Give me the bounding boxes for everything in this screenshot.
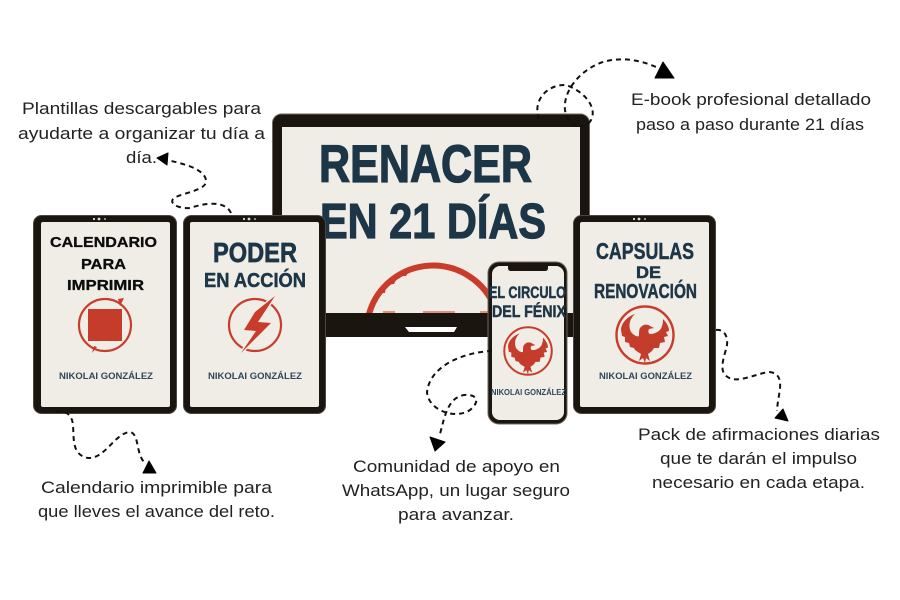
caption: calendario bbox=[38, 478, 275, 521]
title: DEL FÉNIX bbox=[492, 302, 566, 321]
title bbox=[50, 235, 157, 294]
arrow: to e-book caption bbox=[537, 59, 674, 126]
title: PODER bbox=[213, 237, 297, 268]
tablet screen bbox=[190, 222, 319, 407]
author: NIKOLAI GONZÁLEZ bbox=[491, 387, 566, 397]
title: PARA bbox=[81, 257, 127, 273]
icon: phoenix bbox=[504, 327, 552, 375]
caption: plantillas: Plantillas descargables para bbox=[22, 99, 262, 118]
caption: pack: que te darán el impulso bbox=[660, 449, 857, 468]
caption: e-book bbox=[631, 90, 871, 134]
caption: comunidad: WhatsApp, un lugar seguro bbox=[342, 481, 570, 500]
tablet frame bbox=[34, 216, 176, 414]
title: CALENDARIO bbox=[50, 235, 157, 251]
title bbox=[204, 237, 306, 292]
laptop emblem arc bbox=[369, 266, 495, 314]
icon: lightning bolt in circle bbox=[229, 296, 281, 353]
phone notch bbox=[508, 266, 548, 271]
caption: e-book: E-book profesional detallado bbox=[631, 90, 871, 109]
phone: el circulo del fenix bbox=[488, 262, 567, 424]
icon: phoenix bbox=[616, 306, 674, 364]
caption: calendario: Calendario imprimible para bbox=[41, 478, 273, 497]
caption: plantillas: ayudarte a organizar tu día a bbox=[18, 124, 266, 143]
author: NIKOLAI GONZÁLEZ bbox=[208, 371, 303, 381]
title: EN ACCIÓN bbox=[204, 268, 306, 292]
phone screen bbox=[492, 266, 564, 420]
tablet frame bbox=[574, 216, 716, 414]
laptop base bbox=[320, 313, 574, 337]
author: NIKOLAI GONZÁLEZ bbox=[59, 371, 154, 381]
title: DE bbox=[636, 263, 661, 282]
title: EL CIRCULO bbox=[489, 284, 566, 302]
laptop title: EN 21 DÍAS bbox=[320, 195, 546, 249]
tablet: calendario para imprimir bbox=[34, 216, 176, 414]
arrow: to pack caption bbox=[716, 330, 788, 421]
caption: comunidad: Comunidad de apoyo en bbox=[353, 457, 560, 476]
laptop title bbox=[319, 135, 546, 249]
camera dots bbox=[633, 218, 646, 220]
tablet: capsulas de renovacion bbox=[574, 216, 716, 414]
icon: red square in circle bbox=[79, 298, 131, 353]
caption: pack: Pack de afirmaciones diarias bbox=[638, 425, 880, 444]
camera dots bbox=[93, 218, 106, 220]
caption: pack bbox=[638, 425, 880, 492]
laptop notch bbox=[405, 327, 457, 332]
title: IMPRIMIR bbox=[67, 278, 145, 294]
arrow: to calendario caption bbox=[56, 412, 156, 473]
laptop title: RENACER bbox=[319, 135, 532, 194]
caption: e-book: paso a paso durante 21 días bbox=[636, 115, 864, 134]
caption: comunidad bbox=[342, 457, 570, 524]
author: NIKOLAI GONZÁLEZ bbox=[599, 371, 693, 381]
tablet frame bbox=[184, 216, 326, 414]
caption: calendario: que lleves el avance del reto. bbox=[38, 502, 275, 521]
laptop: renacer en 21 dias bbox=[272, 114, 590, 337]
laptop screen bbox=[282, 127, 580, 317]
tablet screen bbox=[580, 222, 709, 407]
title: RENOVACIÓN bbox=[594, 279, 697, 303]
caption: plantillas bbox=[18, 99, 266, 167]
camera dots bbox=[243, 218, 256, 220]
title: CAPSULAS bbox=[596, 238, 694, 264]
laptop frame bbox=[272, 114, 590, 336]
caption: pack: necesario en cada etapa. bbox=[652, 473, 865, 492]
arrow: to comunidad caption bbox=[427, 351, 492, 451]
caption: comunidad: para avanzar. bbox=[398, 505, 514, 524]
title bbox=[594, 238, 697, 303]
tablet: poder en accion bbox=[184, 216, 326, 414]
phone frame bbox=[488, 262, 567, 424]
tablet screen bbox=[41, 222, 170, 407]
arrow: to plantillas caption bbox=[157, 153, 231, 213]
caption: plantillas: día. bbox=[126, 148, 157, 167]
title bbox=[489, 284, 566, 321]
